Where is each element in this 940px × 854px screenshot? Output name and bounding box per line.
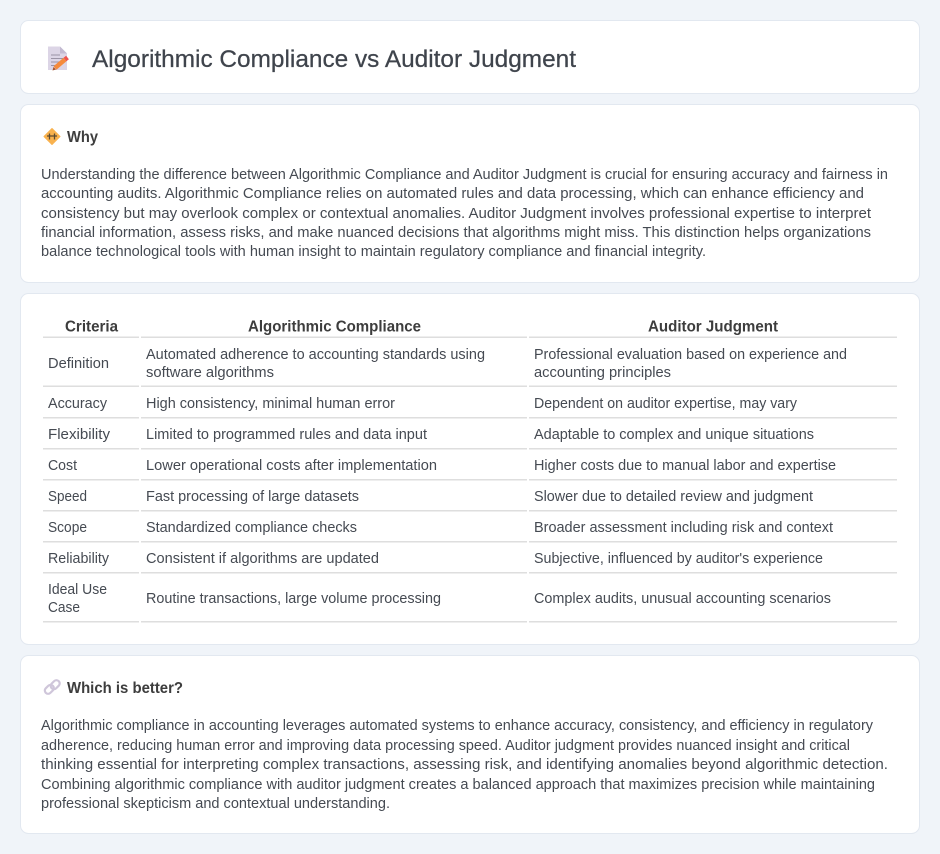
text block: why: balance technological tools with human insight to maintain regulatory compliance and financial integrity.: [41, 244, 706, 260]
row: ideal use case: Routine transactions, large volume processing: [146, 591, 441, 607]
text block: why: accounting audits. Algorithmic Compliance relies on automated rules and data processing, which can enhance efficiency and: [41, 186, 864, 202]
panel: comparison table: [20, 294, 920, 644]
row: scope: Broader assessment including risk and context: [534, 520, 833, 536]
table header row: Algorithmic Compliance: [248, 318, 421, 336]
row: definition: Definition: [48, 356, 109, 372]
text block: which is better: adherence, reducing human error and improving data processing speed. Auditor judgment provides nuanced insight and critical: [41, 738, 850, 754]
text block: which is better: [41, 718, 888, 812]
heading: why: Why: [67, 129, 98, 146]
row: flexibility: Flexibility: [48, 427, 111, 443]
row: speed: Slower due to detailed review and judgment: [534, 489, 813, 505]
row: accuracy: [48, 396, 798, 412]
row: accuracy: Dependent on auditor expertise, may vary: [534, 396, 798, 412]
row: definition: Automated adherence to accounting standards using: [146, 347, 485, 363]
title: Algorithmic Compliance vs Auditor Judgment: [92, 46, 576, 73]
row: ideal use case: Ideal Use: [48, 582, 107, 598]
row: reliability: Reliability: [48, 551, 110, 567]
row: flexibility: Limited to programmed rules and data input: [146, 427, 427, 443]
text block: why: Understanding the difference between Algorithmic Compliance and Auditor Judgment is crucial for ensuring accuracy and fairness in: [41, 167, 888, 183]
row: flexibility: [48, 427, 814, 443]
row: ideal use case: Complex audits, unusual accounting scenarios: [534, 591, 831, 607]
row: ideal use case: Case: [48, 600, 80, 616]
text block: why: consistency but may overlook complex or contextual anomalies. Auditor Judgment involves professional expertise to interpret: [41, 206, 871, 222]
text block: which is better: Combining algorithmic compliance with auditor judgment creates a balanced approach that maximizes precision while maintaining: [41, 777, 875, 793]
panel: which is better: [20, 656, 920, 834]
table header row: Auditor Judgment: [648, 318, 779, 336]
panel: why: [20, 104, 920, 282]
table rules: [43, 336, 897, 622]
icon: warning diamond: [44, 128, 60, 144]
row: ideal use case: [48, 582, 831, 616]
row: speed: [48, 489, 813, 505]
text block: which is better: Algorithmic compliance in accounting leverages automated systems to enhance accuracy, consistency, and efficiency in regulatory: [41, 718, 874, 734]
row: cost: Higher costs due to manual labor and expertise: [534, 458, 836, 474]
table header row: Criteria: [65, 318, 118, 336]
row: definition: [48, 347, 847, 381]
text block: why: [41, 167, 888, 260]
row: flexibility: Adaptable to complex and unique situations: [534, 427, 814, 443]
row: accuracy: Accuracy: [48, 396, 108, 412]
row: scope: Standardized compliance checks: [146, 520, 357, 536]
icon: document with pencil: [48, 46, 68, 70]
row: cost: [48, 458, 836, 474]
panel: title header: [20, 20, 920, 94]
row: scope: [48, 520, 833, 536]
row: definition: accounting principles: [534, 365, 671, 381]
row: cost: Lower operational costs after implementation: [146, 458, 437, 474]
row: definition: software algorithms: [146, 365, 274, 381]
table header row: [65, 318, 779, 336]
row: speed: Speed: [48, 489, 87, 505]
row: accuracy: High consistency, minimal human error: [146, 396, 395, 412]
row: definition: Professional evaluation based on experience and: [534, 347, 847, 363]
row: cost: Cost: [48, 458, 77, 474]
heading: which is better: Which is better?: [67, 680, 183, 697]
row: speed: Fast processing of large datasets: [146, 489, 359, 505]
row: reliability: Consistent if algorithms are updated: [146, 551, 379, 567]
row: reliability: [48, 551, 823, 567]
icon: link: [43, 679, 61, 695]
row: scope: Scope: [48, 520, 87, 536]
text block: which is better: thinking essential for interpreting complex transactions, assessing risk, and identifying anomalies beyond algorithmic detection.: [41, 757, 888, 773]
text block: which is better: professional skepticism and contextual understanding.: [41, 796, 390, 812]
row: reliability: Subjective, influenced by auditor's experience: [534, 551, 823, 567]
text block: why: financial information, assess risks, and make nuanced decisions that algorithms might miss. This distinction helps organizations: [41, 225, 871, 241]
